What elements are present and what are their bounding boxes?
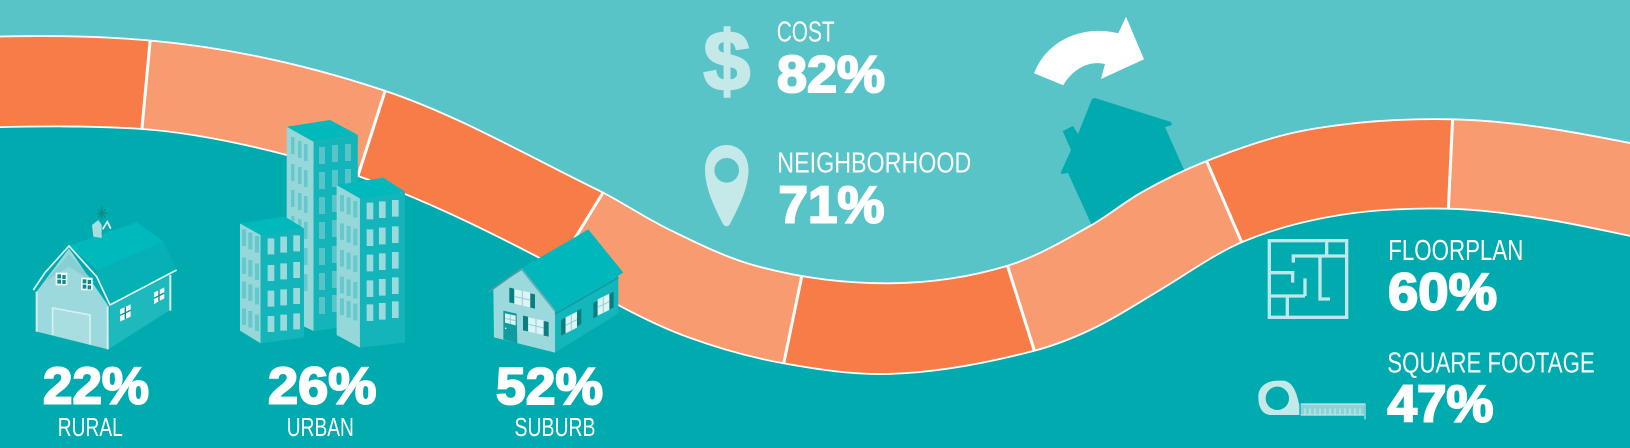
stat: cost label: COST [777, 17, 835, 49]
icon: tall middle building [287, 120, 358, 331]
stat: urban label: URBAN [287, 412, 354, 442]
stat: floorplan value: 60% [1388, 264, 1497, 322]
stat: neighborhood label: NEIGHBORHOOD [777, 148, 971, 180]
stat: suburb label: SUBURB [514, 412, 596, 442]
lower ground [0, 126, 1630, 448]
stat: rural value: 22% [43, 357, 149, 415]
icon: left building [240, 217, 304, 343]
stat: floorplan label: FLOORPLAN [1388, 235, 1523, 267]
icon: tape measure [1258, 381, 1365, 419]
stat: neighborhood value: 71% [778, 176, 884, 234]
icon: right building [337, 178, 405, 348]
icon: barn [33, 207, 177, 349]
stat: suburb value: 52% [496, 358, 603, 416]
stat: urban value: 26% [268, 357, 376, 415]
stat: square footage value: 47% [1388, 376, 1494, 434]
icon: location pin [705, 145, 748, 226]
stat: rural label: RURAL [58, 412, 123, 442]
icon: suburban house [488, 229, 623, 353]
icon: floorplan [1269, 241, 1347, 317]
winding road band [0, 35, 1630, 374]
icon: curved arrow [1034, 17, 1144, 85]
stat: cost value: 82% [777, 46, 885, 104]
icon: ghost house silhouette [1061, 98, 1185, 260]
icon: dollar sign: $ [704, 14, 750, 108]
